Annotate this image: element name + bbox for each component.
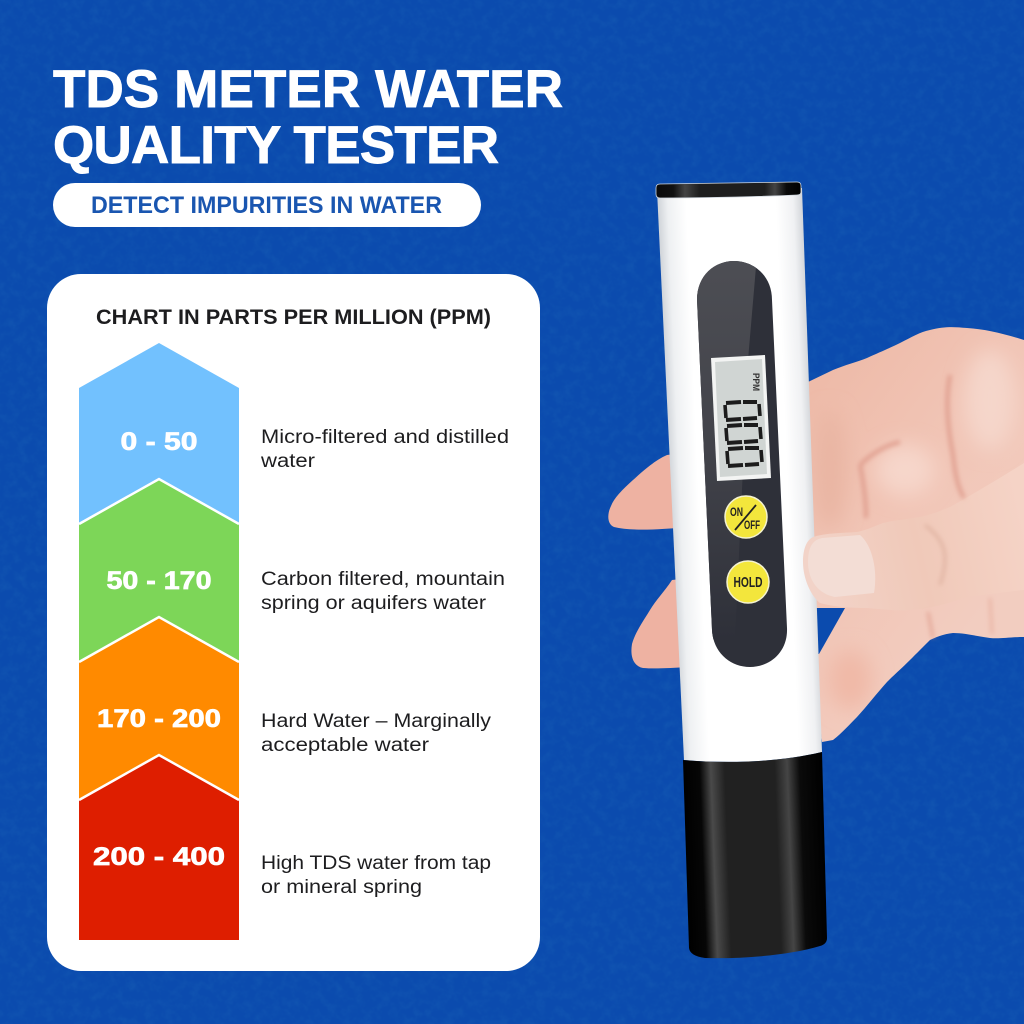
- description: 200-400: High TDS water from tap: [261, 853, 491, 874]
- description: 50-170: Carbon filtered, mountain: [261, 569, 505, 590]
- meter: [656, 182, 827, 958]
- description: 0-50: Micro-filtered and distilled: [261, 427, 509, 448]
- band: 200-400: 200 - 400: [93, 843, 225, 871]
- description: 170-200: acceptable water: [261, 735, 430, 756]
- description: 200-400: or mineral spring: [261, 877, 422, 898]
- palm and fingers: [790, 327, 1024, 742]
- fingertip: middle: [631, 578, 690, 668]
- lcd display: [711, 355, 771, 481]
- button: on/off: ON: [730, 505, 743, 519]
- band: 50-170: [79, 479, 239, 668]
- band: 200-400: [79, 755, 239, 940]
- description: 50-170: [261, 569, 505, 614]
- band: 0-50: 0 - 50: [120, 428, 198, 456]
- band: 170-200: [79, 617, 239, 806]
- hand front: thumb: [803, 375, 1024, 638]
- hand behind meter: [608, 327, 1024, 742]
- gap between fingers: [812, 608, 845, 654]
- button: hold: [727, 561, 769, 603]
- palm shading: [814, 350, 1016, 710]
- chart heading: CHART IN PARTS PER MILLION (PPM): [96, 306, 491, 329]
- panel: ppm chart: [47, 274, 540, 971]
- description: 200-400: [261, 853, 491, 898]
- meter top cap: [656, 182, 801, 198]
- description: 170-200: [261, 711, 492, 756]
- fingertip: index: [608, 452, 690, 530]
- control panel: [690, 255, 787, 667]
- band: 0-50: [79, 343, 239, 530]
- meter body: [657, 188, 822, 762]
- band: 170-200: 170 - 200: [97, 705, 221, 733]
- description: 50-170: spring or aquifers water: [261, 593, 487, 614]
- button: hold: HOLD: [734, 574, 763, 591]
- title: TDS METER WATER: [53, 60, 563, 119]
- title: [53, 60, 563, 175]
- description: 0-50: water: [260, 451, 316, 472]
- lcd digits: [725, 402, 762, 466]
- title: QUALITY TESTER: [53, 116, 499, 175]
- description: 0-50: [260, 427, 509, 472]
- subtitle pill: [53, 183, 481, 227]
- button: on/off: OFF: [744, 518, 760, 532]
- ppm label: PPM: [751, 373, 761, 391]
- thumbnail: [808, 535, 875, 597]
- band: 50-170: 50 - 170: [106, 567, 212, 595]
- knuckle crease lines: [860, 375, 992, 638]
- description: 170-200: Hard Water – Marginally: [261, 711, 492, 732]
- button: on/off: [725, 496, 767, 538]
- meter bottom cap: [683, 752, 827, 958]
- subtitle pill: DETECT IMPURITIES IN WATER: [91, 192, 442, 219]
